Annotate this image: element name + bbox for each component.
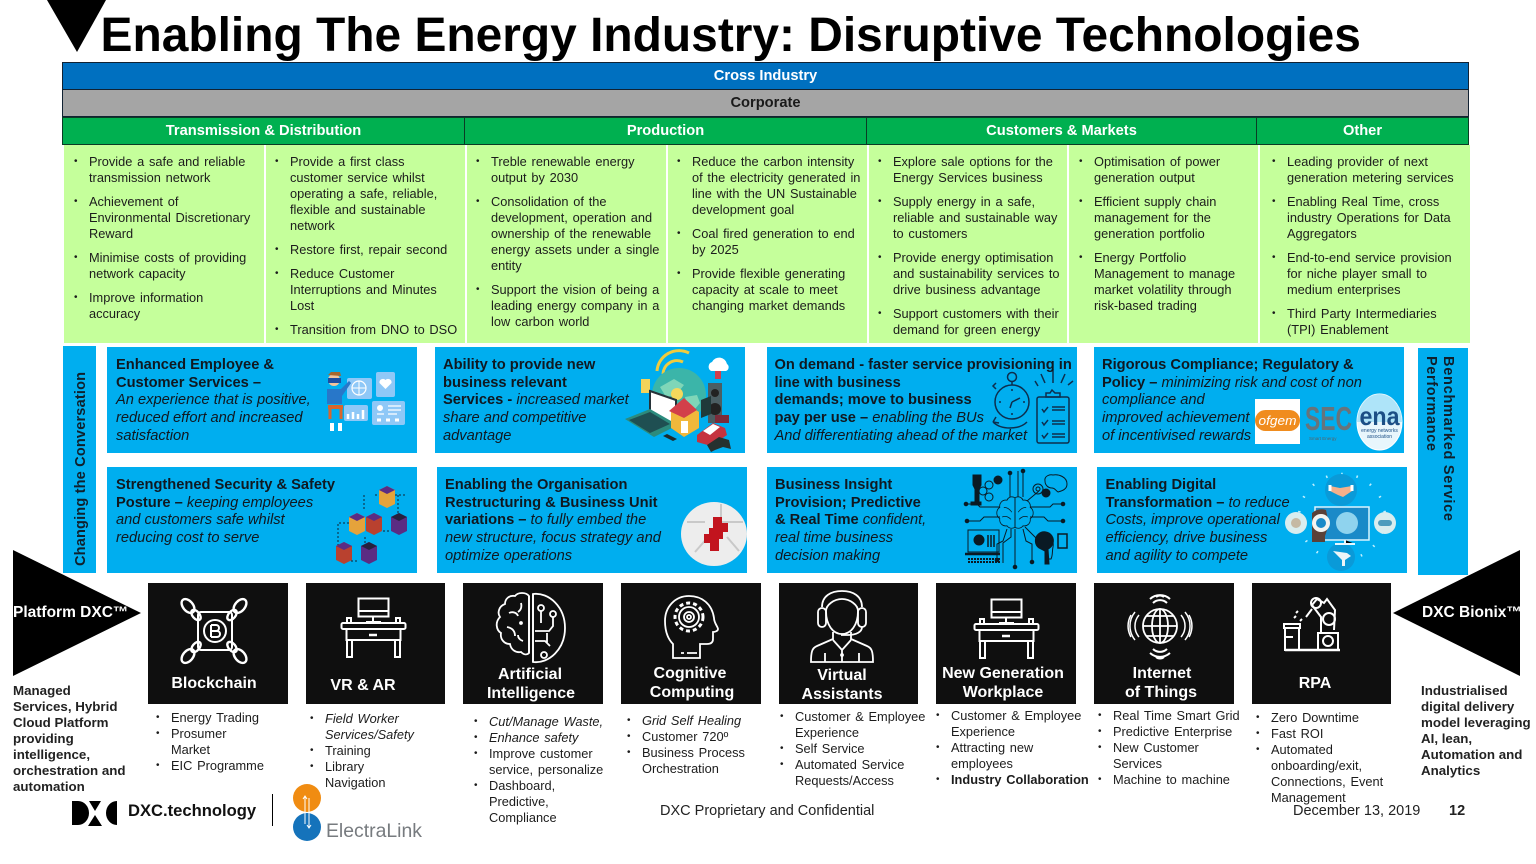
panel: other goals: generation metering services <box>1287 170 1454 185</box>
list: cognitive computing uses: Customer 720º <box>642 729 728 744</box>
panel: enhanced employee and customer services: reduced effort and increased <box>116 410 303 426</box>
panel: virtual assistants: Virtual <box>817 667 867 684</box>
arrow: DXC Bionix <box>1393 550 1522 676</box>
panel: production goals column 1: entity <box>491 258 522 273</box>
panel: internet of things <box>1094 583 1234 704</box>
text: platform DXC description: providing <box>13 731 74 746</box>
panel: customers goals column 2: generation output <box>1094 170 1195 185</box>
panel: enabling digital transformation: efficiency, drive business <box>1106 530 1267 546</box>
panel: customers goals column 2: Optimisation of power <box>1094 154 1220 169</box>
side label: benchmarked service performance <box>1418 348 1468 575</box>
icon: person with headset <box>810 590 874 663</box>
panel: transmission goals column 2 <box>266 145 465 343</box>
panel: virtual assistants: Assistants <box>802 686 882 703</box>
icon: internet of things isometric <box>625 349 731 452</box>
text: platform DXC description: Managed <box>13 683 71 698</box>
panel: enabling digital transformation: Enabling Digital <box>1106 477 1216 493</box>
panel: other goals: industry Operations for Data <box>1287 210 1451 225</box>
panel: customers goals column 1: Supply energy in a safe, <box>893 194 1035 209</box>
panel: enabling the organisation restructuring: variations – to fully embed the <box>445 512 646 528</box>
panel: rigorous compliance: of incentivised rewards <box>1102 428 1251 444</box>
header: production <box>464 117 867 145</box>
text: platform DXC description <box>13 683 126 794</box>
logos: ofgem, SEC and ENA: association <box>1367 434 1392 440</box>
panel: other goals: for niche player small to <box>1287 266 1427 281</box>
list: virtual assistants uses: Customer & Employee <box>795 709 925 724</box>
panel: production goals column 1: ownership of the renewable <box>491 226 651 241</box>
divider: logo separator <box>272 794 273 826</box>
side label: changing the conversation: Changing the Conversation <box>73 372 89 566</box>
panel: new generation workplace <box>936 583 1076 704</box>
panel: cognitive computing: Cognitive <box>654 665 726 682</box>
panel: production goals column 2: changing market demands <box>692 298 845 313</box>
panel: transmission goals column 2: customer service whilst <box>290 170 425 185</box>
header: production: Production <box>627 123 704 139</box>
panel: on demand service provisioning <box>767 347 1077 453</box>
panel: transmission goals column 1: Improve information <box>89 290 203 305</box>
panel: enabling the organisation restructuring: optimize operations <box>445 548 572 564</box>
list: internet of things uses: Predictive Enterprise <box>1113 724 1232 739</box>
header: transmission and distribution <box>62 117 465 145</box>
logo: DXC technology <box>72 801 256 826</box>
icon: stopwatch and checklist <box>992 369 1074 444</box>
panel: strengthened security and safety: Strengthened Security & Safety <box>116 477 335 493</box>
list: AI uses: Improve customer <box>489 746 593 761</box>
list: virtual assistants uses: Automated Service <box>795 757 904 772</box>
panel: rigorous compliance: compliance and <box>1102 392 1205 408</box>
banner: cross industry <box>62 62 1469 90</box>
logo: ElectraLink <box>293 784 422 842</box>
footer: confidentiality: DXC Proprietary and Confidential <box>660 803 874 819</box>
panel: new generation workplace: Workplace <box>963 684 1043 701</box>
list: internet of things uses: Machine to machine <box>1113 772 1230 787</box>
side label: benchmarked service performance: Performance <box>1423 356 1439 451</box>
panel: production goals column 1: output by 2030 <box>491 170 578 185</box>
icon: globe with signal <box>1127 594 1193 660</box>
panel: strengthened security and safety: reducing cost to serve <box>116 530 259 546</box>
panel: transmission goals column 2: Interruptions and Minutes <box>290 282 437 297</box>
banner: cross industry: Cross Industry <box>714 68 817 84</box>
list: RPA uses: Connections, Event <box>1271 774 1383 789</box>
panel: transmission goals column 1: network capacity <box>89 266 186 281</box>
panel: new business relevant services: business relevant <box>443 375 567 391</box>
panel: customers goals column 2: Management to manage <box>1094 266 1235 281</box>
panel: transmission goals column 1: accuracy <box>89 306 140 321</box>
panel: customers goals column 2 <box>1069 145 1258 343</box>
header: customers and markets <box>866 117 1257 145</box>
panel: enabling digital transformation: Costs, improve operational <box>1106 512 1280 528</box>
panel: enabling digital transformation: Transformation – to reduce <box>1106 495 1290 511</box>
panel: customers goals column 1: drive business advantage <box>893 282 1041 297</box>
logos: ofgem, SEC and ENA: Smart Energy <box>1309 436 1337 441</box>
logos: ofgem, SEC and ENA <box>1255 394 1402 450</box>
panel: production goals column 1: low carbon world <box>491 314 589 329</box>
list: cognitive computing uses: Grid Self Healing <box>642 713 741 728</box>
panel: production goals column 2: line with the UN Sustainable <box>692 186 857 201</box>
panel: transmission goals column 2: Provide a first class <box>290 154 405 169</box>
panel: enabling digital transformation: and agility to compete <box>1106 548 1248 564</box>
list: VR and AR uses <box>310 711 414 790</box>
list: AI uses: Cut/Manage Waste, <box>489 714 603 729</box>
panel: production goals column 2: capacity at scale to meet <box>692 282 838 297</box>
list: VR and AR uses: Navigation <box>325 775 385 790</box>
list: internet of things uses: Real Time Smart Grid <box>1113 708 1240 723</box>
panel: new business relevant services: Ability to provide new <box>443 357 595 373</box>
list: new generation workplace uses: Industry Collaboration <box>951 772 1089 787</box>
list: virtual assistants uses <box>780 709 925 788</box>
panel: strengthened security and safety: Posture – keeping employees <box>116 495 313 511</box>
list: cognitive computing uses <box>627 713 745 776</box>
icon: VR person with dashboards <box>327 372 405 431</box>
arrow: platform DXC: Platform DXC™ <box>13 604 128 621</box>
panel: production goals column 1: Consolidation of the <box>491 194 607 209</box>
list: cognitive computing uses: Business Process <box>642 745 745 760</box>
list: RPA uses: Zero Downtime <box>1271 710 1359 725</box>
panel: production goals column 2 <box>668 145 867 343</box>
icon: connected hexagon blocks <box>336 486 407 564</box>
panel: new business relevant services: share and competitive <box>443 410 586 426</box>
panel: strengthened security and safety <box>107 467 417 573</box>
logos: ofgem, SEC and ENA: ena <box>1360 401 1400 431</box>
panel: business insight provision: Business Insight <box>775 477 892 493</box>
panel: customers goals column 2: risk-based trading <box>1094 298 1197 313</box>
list: new generation workplace uses: employees <box>951 756 1013 771</box>
panel: production goals column 1: Treble renewable energy <box>491 154 634 169</box>
panel: other goals: Enabling Real Time, cross <box>1287 194 1439 209</box>
icon: robot arm <box>1283 597 1340 652</box>
icon: puzzle sphere <box>681 502 747 566</box>
list: RPA uses: Management <box>1271 790 1346 805</box>
panel: production goals column 2: Provide flexible generating <box>692 266 845 281</box>
icon: black corner triangle <box>47 0 106 52</box>
panel: new business relevant services: advantage <box>443 428 511 444</box>
panel: production goals column 1: Support the vision of being a <box>491 282 659 297</box>
panel: artificial intelligence: Artificial <box>498 666 562 683</box>
panel: new business relevant services <box>435 347 745 453</box>
side label: changing the conversation <box>63 346 96 573</box>
panel: RPA <box>1252 583 1391 704</box>
list: VR and AR uses: Library <box>325 759 364 774</box>
panel: other goals: End-to-end service provision <box>1287 250 1452 265</box>
icon: brain and circuit <box>496 592 566 664</box>
logo: ElectraLink: ElectraLink <box>326 820 422 842</box>
list: AI uses: service, personalize <box>489 762 603 777</box>
panel: customers goals column 1: demand for green energy <box>893 322 1040 337</box>
list: RPA uses: Automated <box>1271 742 1333 757</box>
header: other <box>1256 117 1469 145</box>
arrow: platform DXC <box>13 550 141 676</box>
list: RPA uses: onboarding/exit, <box>1271 758 1362 773</box>
header: other: Other <box>1343 123 1382 139</box>
panel: enhanced employee and customer services: satisfaction <box>116 428 189 444</box>
panel: other goals: Third Party Intermediaries <box>1287 306 1437 321</box>
header: customers and markets: Customers & Markets <box>986 123 1137 139</box>
list: AI uses: Dashboard, <box>489 778 555 793</box>
panel: VR and AR: VR & AR <box>330 677 396 694</box>
list: virtual assistants uses: Self Service <box>795 741 864 756</box>
panel: transmission goals column 2: Transition from DNO to DSO <box>290 322 457 337</box>
panel: enhanced employee and customer services: Customer Services – <box>116 375 261 391</box>
panel: new business relevant services: Services - increased market <box>443 392 629 408</box>
list: blockchain uses: Market <box>171 742 210 757</box>
text: platform DXC description: Cloud Platform <box>13 715 109 730</box>
list: blockchain uses <box>156 710 264 773</box>
panel: artificial intelligence: Intelligence <box>487 685 575 702</box>
panel: blockchain: Blockchain <box>171 675 257 692</box>
panel: customers goals column 1: Energy Services business <box>893 170 1043 185</box>
list: internet of things uses <box>1098 708 1240 787</box>
panel: production goals column 2: development goal <box>692 202 794 217</box>
icon: desk with monitor <box>974 598 1040 659</box>
panel: customers goals column 2: Efficient supply chain <box>1094 194 1216 209</box>
panel: transmission goals column 2: operating a safe, reliable, <box>290 186 437 201</box>
panel: other goals: medium enterprises <box>1287 282 1401 297</box>
panel: on demand service provisioning: pay per use – enabling the BUs <box>774 410 984 426</box>
list: blockchain uses: EIC Programme <box>171 758 264 773</box>
panel: artificial intelligence <box>463 583 603 704</box>
panel: production goals column 1: development, operation and <box>491 210 652 225</box>
panel: customers goals column 1: and sustainability services to <box>893 266 1060 281</box>
panel: transmission goals column 2: Reduce Customer <box>290 266 394 281</box>
panel: production goals column 1 <box>467 145 666 343</box>
panel: business insight provision: decision making <box>775 548 880 564</box>
panel: customers goals column 2: generation portfolio <box>1094 226 1205 241</box>
panel: customers goals column 1: Provide energy optimisation <box>893 250 1053 265</box>
logos: ofgem, SEC and ENA: ofgem <box>1258 414 1296 428</box>
list: internet of things uses: New Customer <box>1113 740 1199 755</box>
panel: enhanced employee and customer services: Enhanced Employee & <box>116 357 274 373</box>
panel: customers goals column 1 <box>869 145 1067 343</box>
panel: transmission goals column 2: flexible and sustainable <box>290 202 425 217</box>
panel: enabling the organisation restructuring <box>437 467 747 573</box>
banner: corporate <box>62 89 1469 117</box>
list: blockchain uses: Prosumer <box>171 726 226 741</box>
list: VR and AR uses: Services/Safety <box>325 727 414 742</box>
list: AI uses: Compliance <box>489 810 557 825</box>
panel: on demand service provisioning: demands; move to business <box>774 392 972 408</box>
panel: production goals column 1: leading energy company in a <box>491 298 659 313</box>
panel: RPA: RPA <box>1299 675 1331 692</box>
panel: customers goals column 1: Support customers with their <box>893 306 1059 321</box>
list: AI uses <box>474 714 603 825</box>
panel: cognitive computing: Computing <box>650 684 734 701</box>
panel: customers goals column 1: reliable and sustainable way <box>893 210 1057 225</box>
text: DXC Bionix description: AI, lean, <box>1421 731 1472 746</box>
panel: production goals column 2: Reduce the carbon intensity <box>692 154 854 169</box>
text: platform DXC description: intelligence, <box>13 747 90 762</box>
panel: transmission goals column 1: Reward <box>89 226 133 241</box>
panel: other goals <box>1260 145 1470 343</box>
panel: transmission goals column 1 <box>64 145 264 343</box>
panel: customers goals column 1: Explore sale options for the <box>893 154 1053 169</box>
panel: business insight provision <box>767 467 1077 573</box>
panel: transmission goals column 2: Restore first, repair second <box>290 242 447 257</box>
panel: transmission goals column 1: Provide a safe and reliable <box>89 154 245 169</box>
panel: enabling the organisation restructuring: Enabling the Organisation <box>445 477 627 493</box>
text: DXC Bionix description: Analytics <box>1421 763 1480 778</box>
panel: business insight provision: real time business <box>775 530 893 546</box>
list: blockchain uses: Energy Trading <box>171 710 259 725</box>
panel: transmission goals column 1: Achievement of <box>89 194 178 209</box>
logo: DXC technology: DXC.technology <box>128 801 256 820</box>
list: new generation workplace uses: Experience <box>951 724 1015 739</box>
header: transmission and distribution: Transmission & Distribution <box>166 123 361 139</box>
panel: customers goals column 2: management for the <box>1094 210 1211 225</box>
panel: transmission goals column 2: network <box>290 218 335 233</box>
title: Enabling The Energy Industry: Disruptive Technologies <box>100 9 1361 62</box>
side label: benchmarked service performance: Benchmarked Service <box>1440 356 1456 521</box>
footer: date: December 13, 2019 <box>1293 803 1420 819</box>
panel: transmission goals column 1: Environmental Discretionary <box>89 210 250 225</box>
panel: enabling the organisation restructuring: Restructuring & Business Unit <box>445 495 658 511</box>
panel: strengthened security and safety: and customers safe whilst <box>116 512 285 528</box>
panel: other goals: Leading provider of next <box>1287 154 1428 169</box>
panel: enabling the organisation restructuring: new structure, focus strategy and <box>445 530 661 546</box>
panel: production goals column 1: energy assets under a single <box>491 242 659 257</box>
panel: other goals: Aggregators <box>1287 226 1357 241</box>
panel: production goals column 2: of the electricity generated in <box>692 170 860 185</box>
panel: enabling digital transformation <box>1097 467 1407 573</box>
panel: rigorous compliance <box>1094 347 1404 453</box>
panel: rigorous compliance: Policy – minimizing risk and cost of non <box>1102 375 1362 391</box>
text: DXC Bionix description <box>1421 683 1531 778</box>
panel: cognitive computing <box>621 583 761 704</box>
panel: customers goals column 1: to customers <box>893 226 967 241</box>
list: RPA uses <box>1256 710 1384 805</box>
banner: corporate: Corporate <box>730 95 801 111</box>
panel: new generation workplace: New Generation <box>942 665 1064 682</box>
icon: desk with monitor <box>340 598 406 658</box>
panel: VR and AR <box>306 583 445 704</box>
list: VR and AR uses: Training <box>325 743 371 758</box>
logos: ofgem, SEC and ENA: energy networks <box>1361 428 1398 434</box>
panel: business insight provision: Provision; Predictive <box>775 495 921 511</box>
text: DXC Bionix description: Automation and <box>1421 747 1522 762</box>
text: DXC Bionix description: Industrialised <box>1421 683 1508 698</box>
icon: digital circle <box>1285 472 1396 571</box>
icon: brain circuit <box>964 468 1068 570</box>
logos: ofgem, SEC and ENA: SEC <box>1305 400 1352 437</box>
panel: internet of things: Internet <box>1133 665 1191 682</box>
text: DXC Bionix description: model leveraging <box>1421 715 1531 730</box>
panel: enhanced employee and customer services <box>107 347 417 453</box>
panel: customers goals column 2: Energy Portfolio <box>1094 250 1186 265</box>
panel: rigorous compliance: Rigorous Compliance; Regulatory & <box>1102 357 1354 373</box>
list: cognitive computing uses: Orchestration <box>642 761 719 776</box>
list: new generation workplace uses: Attracting new <box>951 740 1033 755</box>
list: new generation workplace uses: Customer & Employee <box>951 708 1081 723</box>
list: VR and AR uses: Field Worker <box>325 711 399 726</box>
panel: rigorous compliance: improved achievement <box>1102 410 1249 426</box>
panel: other goals: (TPI) Enablement <box>1287 322 1388 337</box>
panel: production goals column 2: Coal fired generation to end <box>692 226 855 241</box>
panel: on demand service provisioning: And differentiating ahead of the market <box>774 428 1027 444</box>
footer: page number: 12 <box>1449 803 1465 819</box>
icon: blockchain <box>180 598 248 664</box>
panel: transmission goals column 2: Lost <box>290 298 314 313</box>
list: virtual assistants uses: Requests/Access <box>795 773 894 788</box>
panel: business insight provision: & Real Time confident, <box>775 512 926 528</box>
panel: transmission goals column 1: Minimise costs of providing <box>89 250 246 265</box>
panel: production goals column 2: by 2025 <box>692 242 739 257</box>
panel: virtual assistants <box>779 583 918 704</box>
text: platform DXC description: automation <box>13 779 85 794</box>
list: RPA uses: Fast ROI <box>1271 726 1323 741</box>
text: platform DXC description: orchestration and <box>13 763 126 778</box>
list: virtual assistants uses: Experience <box>795 725 859 740</box>
panel: transmission goals column 1: transmission network <box>89 170 210 185</box>
list: AI uses: Predictive, <box>489 794 549 809</box>
panel: blockchain <box>148 583 288 704</box>
list: AI uses: Enhance safety <box>489 730 578 745</box>
icon: head with gear <box>664 595 719 659</box>
panel: enhanced employee and customer services: An experience that is positive, <box>116 392 311 408</box>
text: platform DXC description: Services, Hybrid <box>13 699 117 714</box>
list: internet of things uses: Services <box>1113 756 1162 771</box>
panel: on demand service provisioning: line with business <box>774 375 901 391</box>
panel: on demand service provisioning: On demand - faster service provisioning in <box>774 357 1072 373</box>
arrow: DXC Bionix: DXC Bionix™ <box>1422 604 1522 621</box>
text: DXC Bionix description: digital delivery <box>1421 699 1514 714</box>
list: new generation workplace uses <box>936 708 1089 787</box>
panel: internet of things: of Things <box>1125 684 1197 701</box>
panel: customers goals column 2: market volatility through <box>1094 282 1232 297</box>
